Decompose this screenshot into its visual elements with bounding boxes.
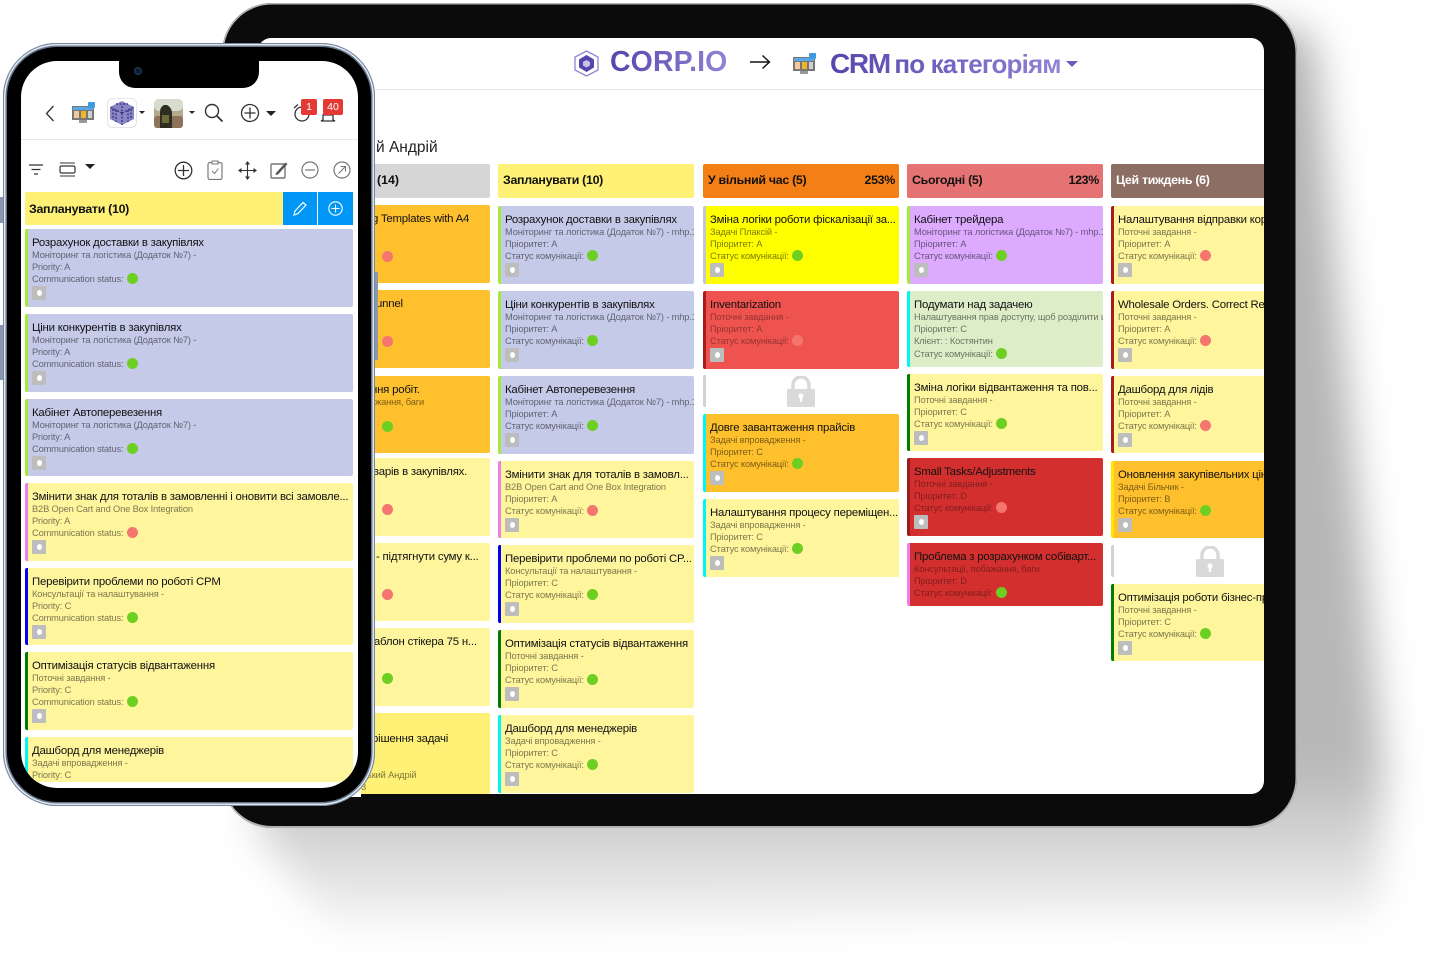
column 2 card 3 xyxy=(703,414,899,492)
phone card 3: Priority: A xyxy=(32,432,70,442)
column 2 header: У вільний час (5) xyxy=(708,173,806,187)
column 3 card 1: Пріоритет: A xyxy=(914,239,966,249)
badge: notifications xyxy=(323,99,343,115)
column 1 card 4: Змінити знак для тоталів в замовл... xyxy=(505,468,689,480)
phone card 2: Communication status: xyxy=(32,359,123,369)
column 1 card 5: Пріоритет: C xyxy=(505,578,558,588)
column 2 card 2: Статус комунікації: xyxy=(710,336,789,346)
icon: CRM monitor xyxy=(72,102,95,123)
column 3 card 5: Проблема з розрахунком собіварт... xyxy=(914,551,1096,563)
column 4 card 4: Задачі Більчик - xyxy=(1118,482,1184,492)
phone device xyxy=(3,43,375,806)
title dropdown caret xyxy=(1066,61,1078,67)
column 2 card 4: Пріоритет: C xyxy=(710,532,763,542)
column 4 card 2: Статус комунікації: xyxy=(1118,336,1197,346)
column 1 card 4 xyxy=(498,460,694,538)
icon: move xyxy=(238,161,257,180)
column 1 card 5: Перевірити проблеми по роботі CP... xyxy=(505,553,692,565)
column 0 card 7 xyxy=(294,713,490,795)
column 1 card 1: Пріоритет: A xyxy=(505,239,557,249)
icon: filter xyxy=(29,164,43,175)
phone card 1: Priority: A xyxy=(32,262,70,272)
column 1 card 6: Поточні завдання - xyxy=(505,651,584,661)
phone card 2: Priority: A xyxy=(32,347,70,357)
icon: clipboard xyxy=(207,160,223,180)
column 1 card 7: Статус комунікації: xyxy=(505,760,584,770)
column 2 card 4: Задачі впровадження - xyxy=(710,520,806,530)
column 2 card 1: Статус комунікації: xyxy=(710,251,789,261)
column 1 card 1: Статус комунікації: xyxy=(505,251,584,261)
column 3 card 3: Статус комунікації: xyxy=(914,419,993,429)
icon: cube avatar xyxy=(107,98,137,128)
phone card 1: Communication status: xyxy=(32,274,123,284)
button: edit column xyxy=(283,192,317,225)
phone card 3: Кабінет Автоперевезення xyxy=(32,406,162,418)
phone side buttons xyxy=(0,197,378,380)
column 2 card 2: Пріоритет: A xyxy=(710,324,762,334)
column 3 card 2: Статус комунікації: xyxy=(914,349,993,359)
phone card 5: Communication status: xyxy=(32,613,123,623)
column 1 card 2: Пріоритет: A xyxy=(505,324,557,334)
column 4 card 4: Пріоритет: B xyxy=(1118,494,1170,504)
logo text: CORP.IO xyxy=(610,46,727,78)
white corner behind phone xyxy=(300,770,361,797)
column 0 header: (14) xyxy=(377,173,399,187)
column 1 card 3 xyxy=(498,376,694,454)
column 4 card 4: Оновлення закупівельних цін xyxy=(1118,468,1264,480)
phone card 7: Задачі впровадження - xyxy=(32,758,128,768)
column 0 card 3: ння робіт. xyxy=(371,384,420,396)
phone toolbar xyxy=(29,160,351,180)
locked card column 4 xyxy=(1111,545,1271,577)
phone card 2 xyxy=(25,314,353,392)
column 4 card 1: Пріоритет: A xyxy=(1118,239,1170,249)
caret xyxy=(266,111,276,116)
column 4 card 3: Дашборд для лідів xyxy=(1118,384,1213,396)
column 0 card 4 xyxy=(294,458,490,536)
column 4 card 5: Статус комунікації: xyxy=(1118,629,1197,639)
phone card 6 xyxy=(25,652,353,730)
icon: search xyxy=(204,104,224,122)
phone card 5 xyxy=(25,568,353,645)
icon: lock xyxy=(1196,546,1224,577)
badge: alarms xyxy=(301,99,317,115)
icon: add circle xyxy=(240,104,260,122)
column 3 card 2: Клієнт: : Костянтин xyxy=(914,336,993,346)
column 4 header: Цей тиждень (6) xyxy=(1116,173,1210,187)
column 4 header xyxy=(1111,164,1271,198)
column 0 card 3: жання, баги xyxy=(375,397,424,407)
icon: bell xyxy=(320,114,336,122)
column 3 card 4 xyxy=(907,458,1103,536)
caret xyxy=(85,164,95,169)
phone navigation bar xyxy=(21,89,358,140)
phone card 6: Priority: C xyxy=(32,685,71,695)
column 2 header: 253% xyxy=(864,173,895,187)
phone card 4: Priority: A xyxy=(32,516,70,526)
column 1 card 2: Статус комунікації: xyxy=(505,336,584,346)
column 4 card 4 xyxy=(1111,460,1271,538)
column 3 card 1 xyxy=(907,206,1103,284)
icon: open xyxy=(333,161,351,179)
column 4 card 1 xyxy=(1111,206,1271,284)
column 2 card 1 xyxy=(703,206,899,284)
user name: й Андрій xyxy=(376,139,438,156)
phone card 3: Communication status: xyxy=(32,444,123,454)
column 0 card 3 xyxy=(294,376,490,453)
column 2 card 2: Поточні завдання - xyxy=(710,312,789,322)
column 0 card 2 xyxy=(294,290,490,368)
column 3 card 2: Подумати над задачею xyxy=(914,299,1032,311)
column 1 header: Запланувати (10) xyxy=(503,173,603,187)
column 2 card 4: Статус комунікації: xyxy=(710,544,789,554)
column 3 card 2 xyxy=(907,291,1103,366)
column 2 card 1: Задачі Плаксій - xyxy=(710,227,777,237)
column 2 card 3: Статус комунікації: xyxy=(710,459,789,469)
column 4 card 3: Пріоритет: A xyxy=(1118,409,1170,419)
phone card 6: Оптимізація статусів відвантаження xyxy=(32,660,215,672)
column 1 card 5: Статус комунікації: xyxy=(505,590,584,600)
phone column header: Запланувати (10) xyxy=(29,202,129,216)
camera xyxy=(134,67,142,75)
button: add card xyxy=(318,192,353,225)
column 1 card 6: Статус комунікації: xyxy=(505,675,584,685)
phone card 2: Ціни конкурентів в закупівлях xyxy=(32,322,182,334)
column 4 card 5 xyxy=(1111,584,1271,661)
column 3 card 4: Small Tasks/Adjustments xyxy=(914,466,1036,478)
column 0 card 7: 3 xyxy=(361,782,366,792)
phone card 6: Communication status: xyxy=(32,697,123,707)
phone card 4: Communication status: xyxy=(32,528,123,538)
column 1 card 6: Оптимізація статусів відвантаження xyxy=(505,638,688,650)
column 3 header: 123% xyxy=(1068,173,1099,187)
column 1 card 7: Дашборд для менеджерів xyxy=(505,723,637,735)
column 4 card 1: Статус комунікації: xyxy=(1118,251,1197,261)
column 4 card 4: Статус комунікації: xyxy=(1118,506,1197,516)
tablet device xyxy=(222,3,1297,828)
column 0 card 5 xyxy=(294,543,490,621)
column 1 card 2: Ціни конкурентів в закупівлях xyxy=(505,299,655,311)
column 3 card 1: Статус комунікації: xyxy=(914,251,993,261)
icon: add xyxy=(174,162,192,180)
column 4 card 1: Поточні завдання - xyxy=(1118,227,1197,237)
phone card 5: Priority: C xyxy=(32,601,71,611)
badge: notifications: 40 xyxy=(327,101,339,113)
column 0 header xyxy=(294,164,490,198)
column 2 card 3: Довге завантаження прайсів xyxy=(710,422,855,434)
column 3 card 5: Консультації, побажання, баги xyxy=(914,564,1040,574)
column 1 card 7: Задачі впровадження - xyxy=(505,736,601,746)
phone card 3 xyxy=(25,398,353,476)
column 0 card 5: - підтягнути суму к... xyxy=(376,551,479,563)
column 3 card 3: Пріоритет: C xyxy=(914,407,967,417)
column 4 card 3 xyxy=(1111,376,1271,453)
column 1 card 3: Кабінет Автоперевезення xyxy=(505,384,635,396)
icon: view xyxy=(59,162,76,176)
column 2 card 1: Пріоритет: A xyxy=(710,239,762,249)
column 2 card 1: Зміна логіки роботи фіскалізації за... xyxy=(710,214,896,226)
phone card 4: B2B Open Cart and One Box Integration xyxy=(32,504,193,514)
column 1 card 3: Статус комунікації: xyxy=(505,421,584,431)
column 3 card 4: Пріоритет: D xyxy=(914,491,967,501)
phone card 6: Поточні завдання - xyxy=(32,673,111,683)
column 1 card 2: Моніторинг та логістика (Додаток №7) - mhp.1 xyxy=(505,312,694,322)
caret xyxy=(189,111,195,114)
column 4 card 5: Поточні завдання - xyxy=(1118,604,1197,614)
column 3 card 2: Налаштування прав доступу, щоб розділити ці xyxy=(914,312,1103,322)
icon: edit xyxy=(270,162,288,179)
column 4 card 2 xyxy=(1111,291,1271,368)
phone card 4 xyxy=(25,483,353,560)
column 0 card 7: ький Андрій xyxy=(367,770,416,780)
column 2 card 3: Задачі впровадження - xyxy=(710,435,806,445)
phone card 2: Моніторинг та логістика (Додаток №7) - xyxy=(32,335,196,345)
column 1 card 5 xyxy=(498,545,694,622)
column 2 header xyxy=(703,164,899,198)
avatar photo xyxy=(154,99,183,128)
column 1 card 1: Моніторинг та логістика (Додаток №7) - mhp.1 xyxy=(505,227,694,237)
column 1 header xyxy=(498,164,694,198)
column 1 card 2 xyxy=(498,291,694,368)
column 4 card 3: Статус комунікації: xyxy=(1118,421,1197,431)
icon: pencil xyxy=(293,202,307,216)
column 3 header xyxy=(907,164,1103,198)
badge: alarms: 1 xyxy=(306,101,312,113)
column 1 card 7 xyxy=(498,715,694,792)
column 2 card 4: Налаштування процесу переміщен... xyxy=(710,507,898,519)
phone card 4: Змінити знак для тоталів в замовленні і оновити всі замовле... xyxy=(32,491,348,503)
arrow xyxy=(750,55,770,69)
column 4 card 5: Пріоритет: C xyxy=(1118,617,1171,627)
column 1 card 4: Статус комунікації: xyxy=(505,506,584,516)
column 0 card 6: шаблон стікера 75 н... xyxy=(365,636,477,648)
column 1 card 4: Пріоритет: A xyxy=(505,494,557,504)
column 1 card 7: Пріоритет: C xyxy=(505,748,558,758)
phone card 7: Дашборд для менеджерів xyxy=(32,745,164,757)
column 3 card 5: Статус комунікації: xyxy=(914,588,993,598)
phone screen xyxy=(21,61,358,788)
column 3 card 1: Моніторинг та логістика (Додаток №7) - mhp.1 xyxy=(914,227,1103,237)
phone card 5: Консультації та налаштування - xyxy=(32,588,164,598)
phone card 1 xyxy=(25,229,353,306)
column 4 card 3: Поточні завдання - xyxy=(1118,396,1197,406)
column 0 card 7: рішення задачі xyxy=(372,733,448,745)
icon: corp hexagon logo xyxy=(574,50,599,77)
icon: alarm clock xyxy=(294,104,310,122)
column 2 card 2 xyxy=(703,291,899,368)
top header bar xyxy=(258,38,1264,90)
tablet screen xyxy=(258,38,1264,794)
column 2 card 3: Пріоритет: C xyxy=(710,447,763,457)
column 1 card 4: B2B Open Cart and One Box Integration xyxy=(505,482,666,492)
icon: lock xyxy=(787,376,815,407)
column 3 card 5: Пріоритет: D xyxy=(914,576,967,586)
phone card 1: Розрахунок доставки в закупівлях xyxy=(32,237,204,249)
column 0 card 1 xyxy=(294,205,490,283)
page title: CRM по категоріям xyxy=(830,48,1061,79)
icon: back chevron xyxy=(46,106,54,122)
icon: add circle xyxy=(328,201,343,216)
phone notch xyxy=(119,61,259,88)
phone card 1: Моніторинг та логістика (Додаток №7) - xyxy=(32,250,196,260)
column 3 card 3 xyxy=(907,374,1103,451)
column 3 header: Сьогодні (5) xyxy=(912,173,982,187)
column 1 card 3: Моніторинг та логістика (Додаток №7) - mhp.1 xyxy=(505,397,694,407)
phone card 7: Priority: C xyxy=(32,770,71,780)
column 3 card 4: Статус комунікації: xyxy=(914,503,993,513)
column 3 card 1: Кабінет трейдера xyxy=(914,214,1003,226)
phone card 7 xyxy=(25,737,353,782)
column 1 card 3: Пріоритет: A xyxy=(505,409,557,419)
phone card 3: Моніторинг та логістика (Додаток №7) - xyxy=(32,420,196,430)
column 3 card 3: Поточні завдання - xyxy=(914,394,993,404)
column 3 card 4: Поточні завдання - xyxy=(914,479,993,489)
column 4 card 2: Поточні завдання - xyxy=(1118,312,1197,322)
phone card 5: Перевірити проблеми по роботі CPM xyxy=(32,576,221,588)
column 1 card 1: Розрахунок доставки в закупівлях xyxy=(505,214,677,226)
phone column header xyxy=(25,192,283,225)
column 0 card 2: unnel xyxy=(376,298,403,310)
column 1 card 5: Консультації та налаштування - xyxy=(505,566,637,576)
column 1 card 6: Пріоритет: C xyxy=(505,663,558,673)
column 1 card 6 xyxy=(498,630,694,708)
column 3 card 5 xyxy=(907,543,1103,606)
locked card column 2 xyxy=(703,375,899,407)
column 3 card 2: Пріоритет: C xyxy=(914,324,967,334)
column 2 card 2: Inventarization xyxy=(710,299,781,311)
icon: minus xyxy=(301,161,319,179)
caret xyxy=(139,111,145,114)
column 0 card 6 xyxy=(294,628,490,706)
icon: CRM monitor xyxy=(793,53,816,74)
column 0 card 4: варів в закупівлях. xyxy=(373,466,467,478)
column 1 card 1 xyxy=(498,206,694,284)
column 3 card 3: Зміна логіки відвантаження та пов... xyxy=(914,382,1097,394)
column 2 card 4 xyxy=(703,499,899,576)
column 0 card 1: g Templates with A4 xyxy=(372,213,469,225)
column 4 card 2: Пріоритет: A xyxy=(1118,324,1170,334)
